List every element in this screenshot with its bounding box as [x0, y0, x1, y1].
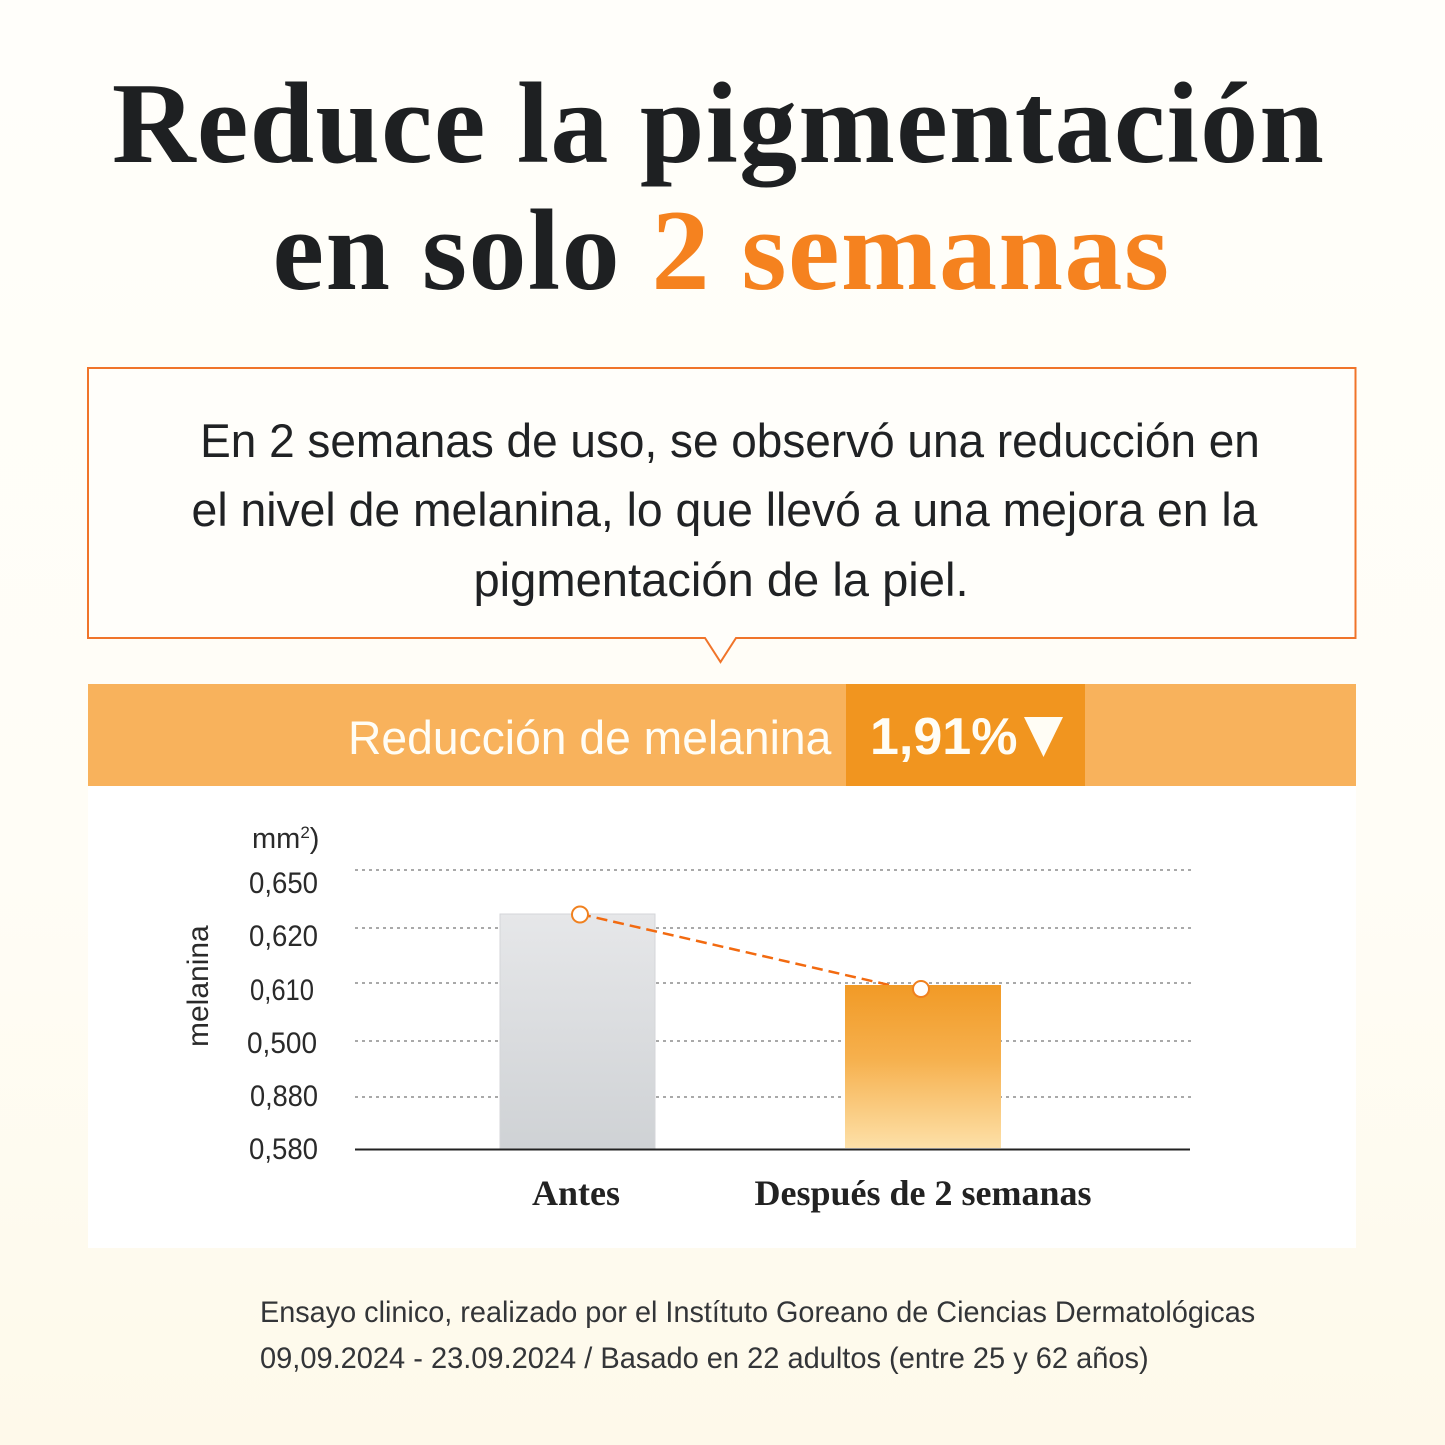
footnote	[260, 1296, 1255, 1375]
banner value: 1,91%	[870, 708, 1017, 766]
callout text: el nivel de melanina, lo que llevó a una mejora en la	[192, 484, 1257, 537]
callout text: En 2 semanas de uso, se observó una reducción en	[200, 414, 1260, 468]
trend line	[580, 914, 889, 985]
y axis labels: 0,500	[247, 1027, 317, 1060]
callout text: pigmentación de la piel.	[473, 554, 969, 606]
banner value	[846, 684, 1085, 786]
unit label: )	[310, 823, 319, 855]
panel: chart background	[88, 786, 1356, 1248]
title: Reduce la pigmentación	[112, 60, 1325, 188]
y axis labels: 0,610	[250, 974, 314, 1007]
y axis labels	[247, 867, 318, 1166]
bar: Después	[845, 985, 1001, 1148]
x axis labels: Después de 2 semanas	[754, 1173, 1092, 1213]
title: en solo 2 semanas	[273, 187, 1170, 315]
callout: description box	[87, 367, 1356, 664]
title	[112, 60, 1325, 315]
banner: melanin reduction	[88, 684, 1356, 786]
bar: Antes	[500, 914, 655, 1148]
footnote: 09,09.2024 - 23.09.2024 / Basado en 22 adultos (entre 25 y 62 años)	[260, 1342, 1149, 1375]
footnote: Ensayo clinico, realizado por el Instítuto Goreano de Ciencias Dermatológicas	[260, 1296, 1255, 1329]
data points	[572, 906, 929, 997]
x axis labels: Antes	[532, 1173, 620, 1213]
y axis title: melanina	[182, 925, 215, 1047]
bar chart	[182, 823, 1191, 1213]
axis baseline	[355, 1148, 1190, 1150]
y axis labels: 0,880	[250, 1080, 318, 1113]
callout text	[192, 414, 1260, 606]
banner label: Reducción de melanina	[348, 711, 831, 764]
y axis labels: 0,580	[249, 1133, 318, 1166]
x axis labels	[532, 1173, 1092, 1213]
unit label: mm	[252, 823, 300, 855]
y axis labels: 0,620	[249, 920, 318, 953]
unit label: 2	[300, 823, 310, 842]
y axis labels: 0,650	[249, 867, 318, 900]
